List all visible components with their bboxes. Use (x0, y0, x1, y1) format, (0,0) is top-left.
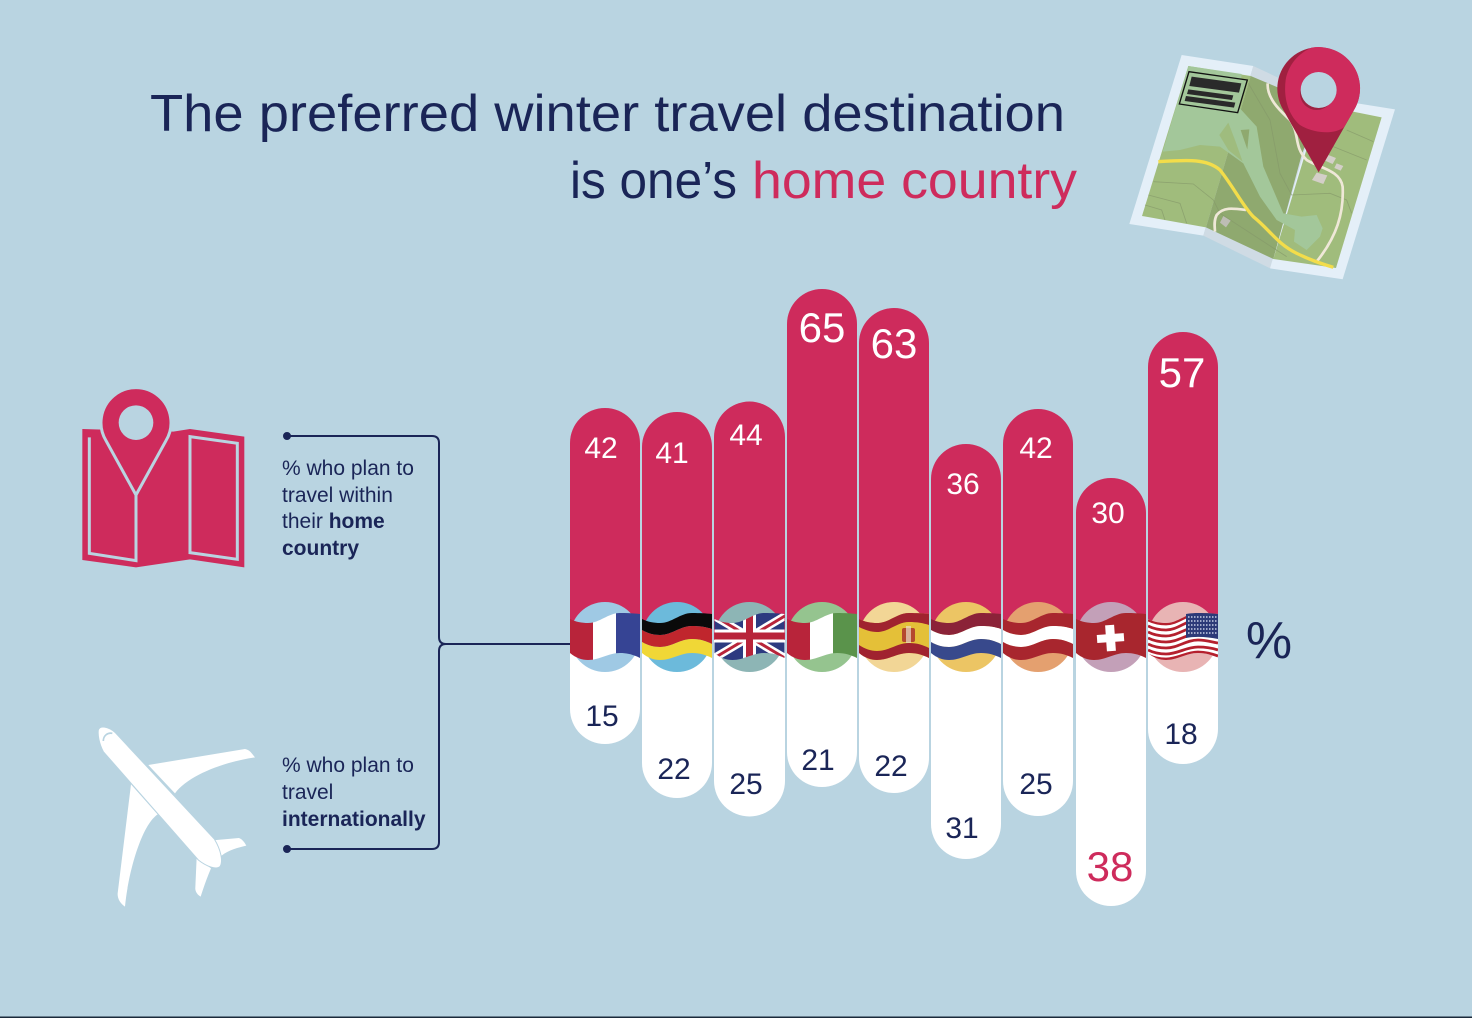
bracket connector (284, 433, 570, 852)
column: Austria (1003, 409, 1073, 816)
legend text: international: % who plan to (282, 754, 414, 777)
column: United States: 18 (1164, 718, 1198, 751)
icon: folded map with location pin (1129, 47, 1395, 279)
column: Spain (859, 308, 929, 793)
column: United Kingdom: 25 (729, 768, 763, 801)
column: Switzerland: 30 (1091, 497, 1125, 530)
column: Austria: 25 (1019, 768, 1053, 801)
title: home country (752, 152, 1077, 210)
column: United Kingdom (712, 402, 786, 816)
column: Austria: 42 (1019, 432, 1053, 465)
title (150, 85, 1077, 210)
bar chart (570, 289, 1218, 906)
column: Italy (787, 289, 857, 787)
icon: airplane (98, 727, 255, 907)
column: France: 15 (585, 700, 619, 733)
legend text: international: internationally (282, 808, 426, 831)
column: Spain: 22 (874, 750, 908, 783)
icon: map with pin (82, 388, 244, 567)
legend text: home country: country (282, 537, 359, 560)
column: United States: 57 (1159, 349, 1205, 396)
legend text: home country: their home (282, 510, 385, 533)
title: is one’s (570, 152, 737, 210)
legend text: home country: % who plan to (282, 457, 414, 480)
column: France (570, 408, 640, 744)
column: Germany: 41 (655, 437, 689, 470)
column: United States (1148, 332, 1218, 764)
column: United Kingdom: 44 (729, 419, 763, 452)
column: Netherlands: 36 (946, 468, 980, 501)
column: Switzerland (1076, 478, 1146, 906)
column: France: 42 (584, 432, 618, 465)
column: Netherlands (931, 444, 1001, 859)
column: Netherlands: 31 (945, 812, 979, 845)
column: Germany: 22 (657, 753, 691, 786)
column: Germany (642, 412, 712, 798)
legend text: international: travel (282, 781, 333, 804)
column: Italy: 21 (801, 744, 835, 777)
percent sign: % (1246, 612, 1292, 670)
legend text: home country: travel within (282, 484, 393, 507)
title: The preferred winter travel destination (150, 85, 1065, 143)
column: Italy: 65 (799, 304, 845, 351)
column: Spain: 63 (871, 320, 917, 367)
column: Switzerland: 38 (1087, 843, 1133, 890)
